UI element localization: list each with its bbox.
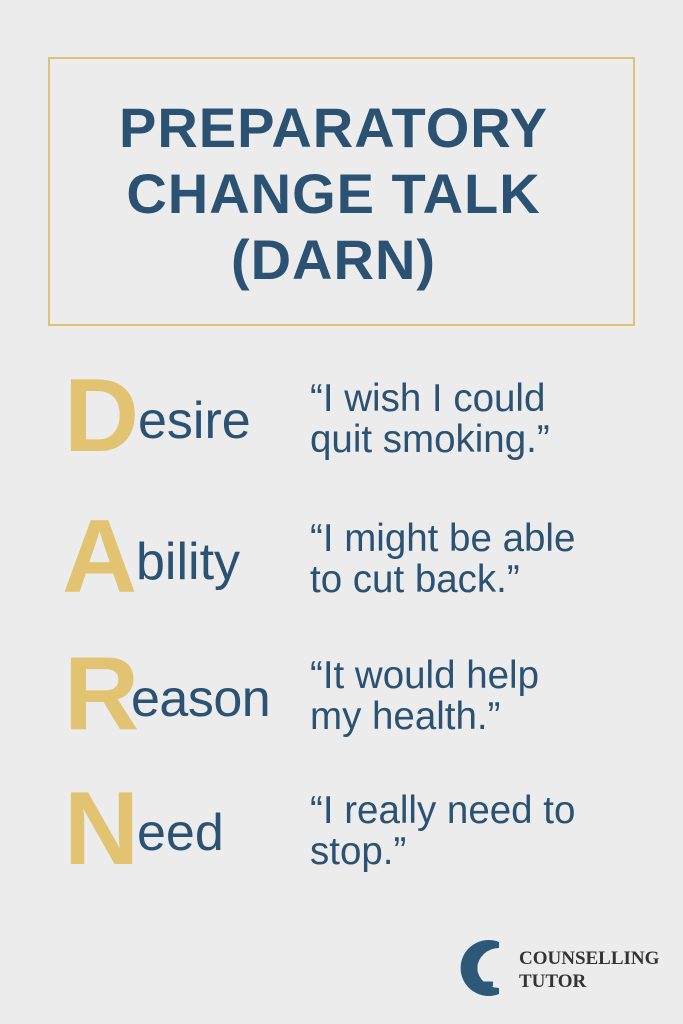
logo text: TUTOR [519,971,586,992]
word reason: eason [131,670,270,728]
row: ability [62,499,575,615]
quote ability: “I might be able [310,517,575,560]
title: (DARN) [231,228,436,291]
logo text: COUNSELLING [519,948,659,969]
title [119,96,548,291]
icon: logo mark [460,940,499,996]
word desire: esire [138,392,251,450]
row: reason [64,636,539,752]
letter D: D [64,358,139,474]
letter N: N [64,771,139,887]
quote reason: my health.” [310,695,500,738]
quote need [310,789,575,873]
quote need: stop.” [310,830,406,873]
letter R: R [64,636,139,752]
word need: eed [137,804,224,862]
row: desire [64,358,550,474]
letter A: A [62,499,137,615]
row: need [64,771,575,887]
title box [48,57,635,326]
quote need: “I really need to [310,789,575,832]
quote ability [310,517,575,601]
logo [460,940,659,996]
title: PREPARATORY [119,96,548,159]
quote ability: to cut back.” [310,558,520,601]
quote reason: “It would help [310,654,539,697]
quote desire: quit smoking.” [310,418,550,461]
word ability: bility [136,533,240,591]
quote desire: “I wish I could [310,377,545,420]
quote reason [310,654,539,738]
logo text [519,948,659,992]
title: CHANGE TALK [126,162,541,225]
quote desire [310,377,550,461]
